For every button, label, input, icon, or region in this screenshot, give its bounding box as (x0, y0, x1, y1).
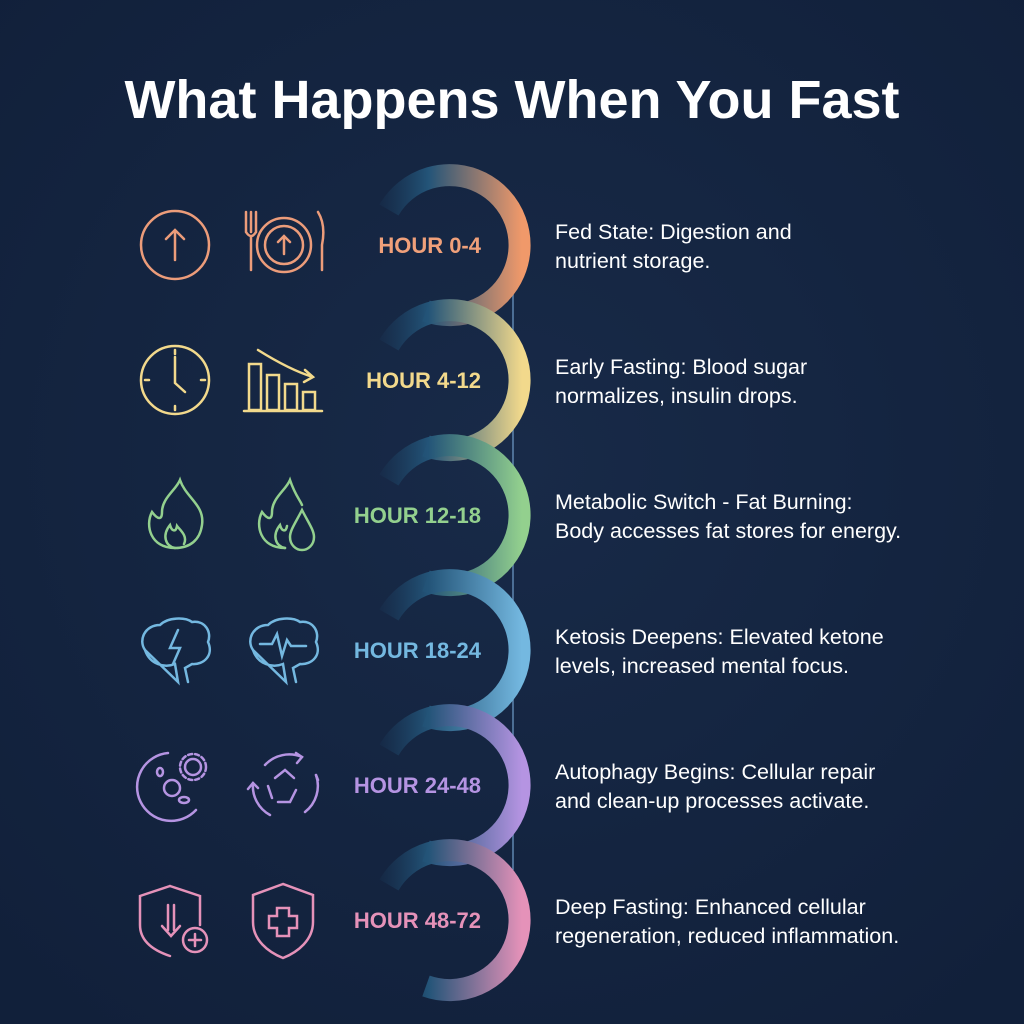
vertical guide line (512, 292, 514, 870)
icon: cell with gear (137, 753, 206, 821)
hour labels: HOUR 12-18 (354, 503, 481, 528)
hour labels: HOUR 0-4 (378, 233, 482, 258)
descriptions: levels, increased mental focus. (555, 654, 849, 678)
hour labels: HOUR 48-72 (354, 908, 481, 933)
icon: shield with down arrow and plus (140, 886, 207, 956)
descriptions: Fed State: Digestion and (555, 220, 792, 244)
descriptions (555, 220, 901, 948)
descriptions: Autophagy Begins: Cellular repair (555, 760, 875, 784)
icon: shield with cross (253, 884, 313, 958)
hour labels: HOUR 4-12 (366, 368, 481, 393)
icon: flame and drop (259, 480, 314, 550)
descriptions: and clean-up processes activate. (555, 789, 869, 813)
descriptions: normalizes, insulin drops. (555, 384, 798, 408)
descriptions: Body accesses fat stores for energy. (555, 519, 901, 543)
descriptions: nutrient storage. (555, 249, 710, 273)
hour labels: HOUR 24-48 (354, 773, 481, 798)
icon: clock (141, 346, 209, 414)
descriptions: Metabolic Switch - Fat Burning: (555, 490, 853, 514)
icon: brain with pulse (250, 619, 318, 682)
title: What Happens When You Fast (124, 70, 900, 130)
hour labels (354, 233, 482, 933)
icon: plate and cutlery (246, 212, 323, 272)
descriptions: Ketosis Deepens: Elevated ketone (555, 625, 884, 649)
descriptions: regeneration, reduced inflammation. (555, 924, 899, 948)
icon: brain with bolt (142, 619, 210, 682)
icon: bar chart down (244, 350, 322, 411)
descriptions: Deep Fasting: Enhanced cellular (555, 895, 866, 919)
hour labels: HOUR 18-24 (354, 638, 482, 663)
descriptions: Early Fasting: Blood sugar (555, 355, 807, 379)
icon: circle arrow up (141, 211, 209, 279)
serpentine timeline (389, 175, 520, 990)
icon: recycle (248, 753, 318, 815)
icon: flame (149, 480, 202, 548)
